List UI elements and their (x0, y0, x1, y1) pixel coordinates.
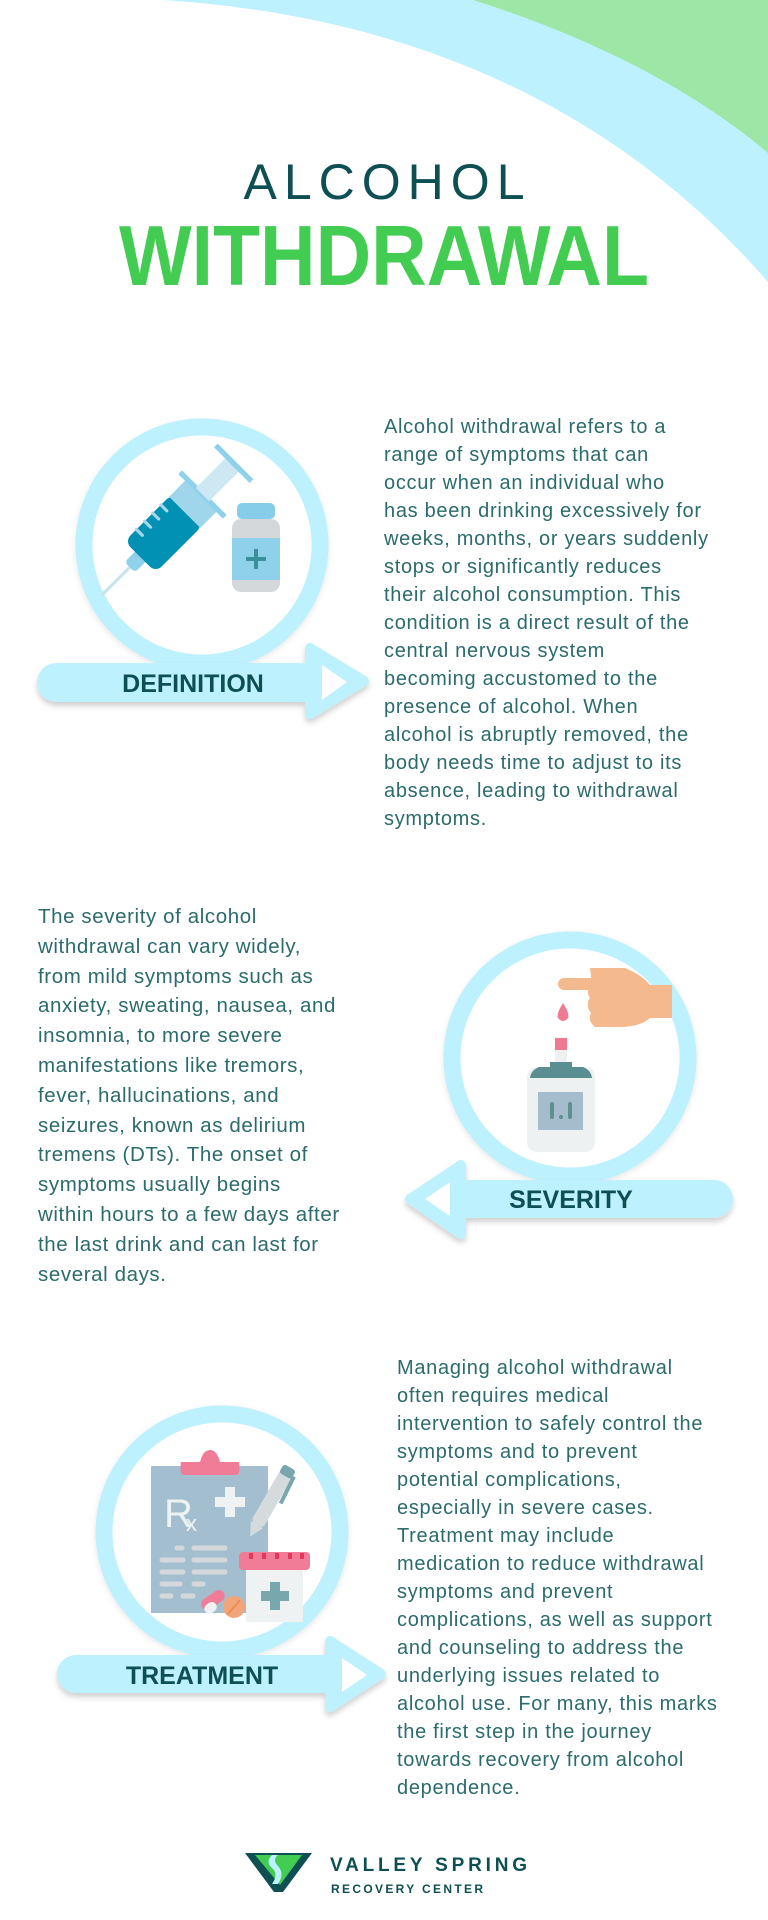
text block: definition: presence of alcohol. When (384, 696, 638, 718)
text block: severity: The severity of alcohol (38, 905, 257, 928)
icon: syringe (79, 441, 256, 618)
text block: severity: anxiety, sweating, nausea, and (38, 994, 336, 1017)
text block: treatment: Managing alcohol withdrawal (397, 1357, 673, 1379)
icon: prescription clipboard: x (186, 1511, 197, 1536)
text block: severity: symptoms usually begins (38, 1173, 281, 1196)
text block: severity (38, 905, 340, 1286)
text block: treatment: especially in severe cases. (397, 1497, 654, 1519)
text block: definition: their alcohol consumption. This (384, 584, 681, 606)
text block: severity: several days. (38, 1263, 167, 1286)
logo: RECOVERY CENTER (331, 1882, 483, 1896)
text block: treatment: potential complications, (397, 1469, 622, 1491)
icon: vial (232, 503, 280, 592)
text block: treatment (397, 1357, 718, 1799)
text block: definition: weeks, months, or years suddenly (384, 528, 709, 550)
icon: valley spring mark (245, 1853, 312, 1892)
text block: treatment: intervention to safely control the (397, 1413, 703, 1435)
logo: VALLEY SPRING (330, 1855, 527, 1876)
icon: prescription clipboard: R (164, 1492, 193, 1536)
text block: definition: body needs time to adjust to its (384, 752, 682, 774)
icon: pills (199, 1588, 245, 1618)
text block: severity: within hours to a few days after (38, 1203, 340, 1226)
text block: treatment: underlying issues related to (397, 1665, 660, 1687)
arrow: severity label (410, 1165, 733, 1234)
text block: treatment: symptoms and prevent (397, 1581, 613, 1603)
text block: severity: manifestations like tremors, (38, 1054, 304, 1077)
arrow: definition label (37, 648, 364, 714)
arrow: severity label: SEVERITY (509, 1186, 633, 1214)
text block: definition: central nervous system (384, 640, 605, 662)
icon: pen (244, 1464, 299, 1542)
text block: treatment: often requires medical (397, 1385, 609, 1407)
logo (245, 1853, 527, 1896)
text block: treatment: symptoms and to prevent (397, 1441, 638, 1463)
text block: definition: absence, leading to withdrawal (384, 780, 679, 802)
arrow: definition label: DEFINITION (122, 670, 264, 698)
icon: hand with blood drop (558, 968, 672, 1027)
panel: severity graphic (410, 940, 733, 1234)
text block: treatment: towards recovery from alcohol (397, 1749, 684, 1771)
text block: definition: has been drinking excessively for (384, 500, 702, 522)
text block: definition: symptoms. (384, 808, 487, 830)
icon ring: definition (84, 427, 320, 663)
text block: severity: tremens (DTs). The onset of (38, 1143, 308, 1166)
text block: severity: withdrawal can vary widely, (38, 935, 301, 958)
text block: definition: becoming accustomed to the (384, 668, 658, 690)
text block: treatment: medication to reduce withdrawal (397, 1553, 704, 1575)
text block: severity: insomnia, to more severe (38, 1024, 283, 1047)
text block: severity: fever, hallucinations, and (38, 1084, 279, 1107)
title: WITHDRAWAL (119, 209, 649, 304)
text block: definition: range of symptoms that can (384, 444, 649, 466)
text block: treatment: complications, as well as support (397, 1609, 712, 1631)
text block: treatment: and counseling to address the (397, 1637, 684, 1659)
text block: definition: stops or significantly reduces (384, 556, 662, 578)
text block: definition: condition is a direct result of the (384, 612, 690, 634)
arrow: treatment label (57, 1641, 381, 1707)
icon ring: severity (452, 940, 688, 1176)
text block: treatment: dependence. (397, 1777, 520, 1799)
arrow: treatment label: TREATMENT (126, 1662, 278, 1690)
icon ring: treatment (104, 1414, 340, 1650)
title: ALCOHOL (244, 154, 524, 210)
text block: definition (384, 416, 709, 830)
panel: treatment graphic (57, 1414, 381, 1707)
text block: definition: alcohol is abruptly removed, the (384, 724, 689, 746)
text block: definition: occur when an individual who (384, 472, 665, 494)
icon: medicine jar (239, 1552, 310, 1622)
title (119, 154, 649, 304)
icon: glucose meter (527, 1038, 595, 1152)
icon: prescription clipboard (151, 1450, 268, 1613)
text block: severity: seizures, known as delirium (38, 1114, 306, 1137)
text block: treatment: Treatment may include (397, 1525, 614, 1547)
text block: severity: the last drink and can last for (38, 1233, 319, 1256)
text block: definition: Alcohol withdrawal refers to a (384, 416, 666, 438)
text block: severity: from mild symptoms such as (38, 965, 313, 988)
text block: treatment: the first step in the journey (397, 1721, 652, 1743)
panel: definition graphic (37, 427, 364, 714)
text block: treatment: alcohol use. For many, this marks (397, 1693, 718, 1715)
